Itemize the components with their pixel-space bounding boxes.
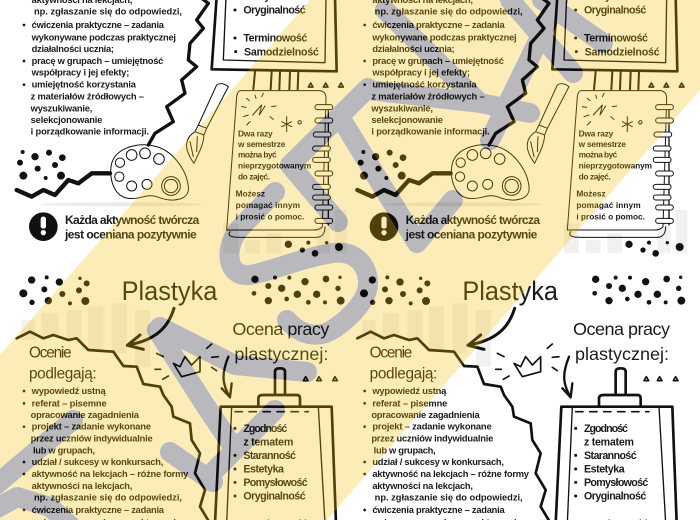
- callout text: [405, 213, 540, 241]
- list: ocenie podlegaja: aktywności na lekcjach,: [372, 481, 473, 491]
- shadow: [42, 202, 202, 206]
- arrow: [127, 308, 174, 349]
- zigzag lower: [357, 173, 451, 197]
- list: ocenie podlegaja continued: np. zgłaszanie się do odpowiedzi,: [375, 7, 523, 17]
- list: ocena pracy continued: Terminowość: [584, 33, 648, 45]
- title: Plastyka: [462, 276, 558, 306]
- list: ocenie podlegaja: lub w grupach,: [33, 445, 95, 455]
- list: ocenie podlegaja continued: i porządkowanie informacji.: [31, 127, 149, 137]
- callout text: jest oceniana pozytywnie: [64, 227, 197, 241]
- list: ocena pracy: Estetyka: [243, 464, 284, 476]
- heading: ocena pracy: Ocena pracy: [573, 319, 670, 339]
- list: ocenie podlegaja continued: działalności ucznia;: [32, 44, 114, 54]
- list: ocenie podlegaja: przez uczniów indywidualnie: [371, 434, 493, 444]
- list: ocenie podlegaja: opracowanie zagadnienia: [31, 410, 140, 420]
- list: ocenie podlegaja continued: umiejętność korzystania: [372, 80, 477, 90]
- list: ocenie podlegaja: referat – pisemne: [372, 398, 447, 408]
- pale brush strokes: [564, 210, 687, 253]
- list: ocena pracy: Zgodność: [243, 423, 287, 435]
- list: ocena pracy: z tematem: [584, 437, 634, 449]
- heading: ocena pracy: [232, 319, 329, 364]
- heading: ocena pracy: plastycznej:: [234, 344, 328, 364]
- list: ocena pracy: Pomysłowość: [584, 477, 648, 489]
- triangles: [303, 377, 337, 381]
- notebook text: Możesz: [576, 189, 606, 199]
- heading: ocena pracy: Ocena pracy: [232, 319, 329, 339]
- list: ocenie podlegaja continued: np. zgłaszanie się do odpowiedzi,: [34, 7, 182, 17]
- list: ocenie podlegaja: udział / sukcesy w konkursach,: [372, 457, 504, 467]
- dots right: [592, 276, 685, 305]
- list: ocenie podlegaja: projekt – zadanie wykonane: [32, 422, 151, 432]
- list: ocenie podlegaja: opracowanie zagadnienia: [371, 410, 480, 420]
- icon: palette: [451, 145, 529, 200]
- list: ocenie podlegaja: np. zgłaszanie się do odpowiedzi,: [375, 493, 523, 503]
- list: ocenie podlegaja: lub w grupach,: [374, 445, 436, 455]
- arrow: [222, 357, 232, 397]
- panel: bottom right tile: [357, 275, 685, 520]
- zigzag divider: [489, 0, 549, 145]
- list: ocena pracy: Oryginalność: [584, 491, 646, 503]
- list: ocenie podlegaja: udział / sukcesy w konkursach,: [32, 457, 163, 467]
- zigzag divider: [17, 332, 210, 520]
- list: ocenie podlegaja continued: działalności ucznia;: [372, 44, 455, 54]
- panel: top right tile: [357, 0, 687, 257]
- icon: brush: [527, 84, 569, 163]
- notebook text: [576, 128, 652, 222]
- frame: easel: [552, 0, 677, 71]
- list: ocena pracy: Staranność: [243, 450, 296, 462]
- list: ocenie podlegaja: aktywność na lekcjach – różne formy: [32, 469, 189, 479]
- notebook text: i prosić o pomoc.: [576, 212, 645, 222]
- frame: bag: [215, 368, 336, 520]
- list: ocena pracy continued: [574, 0, 660, 58]
- callout text: jest oceniana pozytywnie: [405, 227, 538, 241]
- list: ocenie podlegaja continued: i porządkowanie informacji.: [371, 127, 490, 137]
- list: ocenie podlegaja continued: pracę w grupach – umiejętność: [372, 56, 504, 66]
- title: Plastyka: [122, 276, 217, 306]
- list: ocenie podlegaja: ćwiczenia praktyczne – zadania: [372, 505, 505, 515]
- heading: ocena pracy: [573, 319, 670, 364]
- list: ocena pracy: Pomysłowość: [243, 477, 308, 489]
- pale brush strokes: [362, 303, 491, 367]
- callout text: Każda aktywność twórcza: [406, 213, 540, 227]
- notebook text: można być: [579, 150, 618, 160]
- list: ocenie podlegaja: referat – pisemne: [32, 398, 107, 408]
- heading: ocenie podlegaja: [29, 344, 97, 382]
- list: ocenie podlegaja: aktywność na lekcjach – różne formy: [372, 469, 530, 479]
- list: ocena pracy: z tematem: [243, 437, 293, 449]
- notebook: [227, 91, 333, 237]
- list: ocena pracy continued: Oryginalność: [243, 5, 306, 17]
- pale brush strokes: [223, 210, 347, 253]
- heading: ocenie podlegaja: Ocenie: [370, 344, 412, 361]
- list: ocena pracy continued: Oryginalność: [584, 5, 646, 17]
- list: ocena pracy continued: Terminowość: [243, 33, 307, 45]
- icon: crown: [496, 344, 559, 379]
- arrow: [562, 357, 572, 397]
- notebook text: do zajęć.: [579, 171, 611, 181]
- list: ocenie podlegaja continued: współpracy i jej efekty;: [31, 68, 129, 78]
- notebook text: w semestrze: [237, 139, 286, 149]
- icon: exclamation: [370, 212, 398, 241]
- notebook text: Możesz: [236, 189, 265, 199]
- list: ocenie podlegaja: [363, 386, 530, 520]
- list: ocenie podlegaja continued: [23, 0, 182, 137]
- arrow: [468, 308, 515, 349]
- list: ocenie podlegaja continued: wykonywane podczas praktycznej: [371, 32, 517, 42]
- dots left: [19, 275, 90, 305]
- zigzag divider: [357, 332, 551, 520]
- frame: bag: [556, 368, 677, 520]
- dots lower: [625, 241, 684, 257]
- notebook text: pomagać innym: [236, 200, 300, 210]
- dots: [358, 150, 406, 180]
- notebook text: pomagać innym: [576, 200, 641, 210]
- list: ocena pracy: Staranność: [584, 450, 637, 462]
- list: ocena pracy continued: Samodzielność: [244, 46, 319, 58]
- heading: ocenie podlegaja: podlegają:: [370, 365, 437, 382]
- list: ocenie podlegaja continued: selekcjonowanie: [371, 115, 443, 125]
- icon: exclamation: [29, 212, 58, 241]
- icon: brush: [187, 84, 228, 163]
- dots left: [360, 275, 430, 305]
- list: ocena pracy: Oryginalność: [243, 491, 306, 503]
- list: ocenie podlegaja continued: z materiałów źródłowych –: [31, 91, 144, 101]
- list: ocenie podlegaja: ćwiczenia praktyczne – zadania: [32, 505, 165, 515]
- heading: ocenie podlegaja: Ocenie: [29, 344, 72, 361]
- list: ocena pracy: Estetyka: [584, 464, 625, 476]
- list: ocena pracy continued: Samodzielność: [585, 46, 660, 58]
- zigzag lower: [17, 173, 110, 197]
- notebook text: Dwa razy: [238, 128, 273, 138]
- icon: crown: [155, 344, 218, 379]
- notebook text: i prosić o pomoc.: [236, 212, 304, 222]
- triangles: [649, 83, 684, 87]
- dots lower: [285, 241, 343, 257]
- frame: easel: [212, 0, 337, 71]
- notebook text: [236, 128, 311, 222]
- shadow: [382, 202, 542, 206]
- list: ocenie podlegaja continued: ćwiczenia praktyczne – zadania: [32, 20, 165, 30]
- zigzag divider: [148, 0, 208, 145]
- list: ocena pracy: Zgodność: [584, 423, 628, 435]
- dots: [17, 150, 66, 180]
- list: ocenie podlegaja continued: wyszukiwanie,: [30, 103, 92, 113]
- list: ocenie podlegaja: wypowiedź ustną: [371, 386, 447, 396]
- heading: ocena pracy: plastycznej:: [575, 344, 669, 364]
- list: ocenie podlegaja continued: umiejętność korzystania: [32, 80, 137, 90]
- callout text: Każda aktywność twórcza: [65, 213, 200, 227]
- list: ocenie podlegaja continued: wykonywane podczas praktycznej: [31, 32, 176, 42]
- notebook: [567, 91, 673, 237]
- notebook text: Dwa razy: [579, 128, 614, 138]
- notebook text: do zajęć.: [238, 171, 270, 181]
- notebook text: nieprzygotowanym: [238, 161, 311, 171]
- list: ocenie podlegaja continued: pracę w grupach – umiejętność: [32, 56, 163, 66]
- callout text: [64, 213, 200, 241]
- list: ocena pracy continued: [233, 0, 319, 58]
- list: ocenie podlegaja: np. zgłaszanie się do odpowiedzi,: [34, 493, 182, 503]
- list: ocenie podlegaja continued: ćwiczenia praktyczne – zadania: [372, 20, 505, 30]
- heading: ocenie podlegaja: [370, 344, 437, 382]
- list: ocenie podlegaja: przez uczniów indywidualnie: [31, 434, 153, 444]
- notebook text: w semestrze: [578, 139, 626, 149]
- notebook text: można być: [238, 150, 277, 160]
- list: ocenie podlegaja continued: selekcjonowanie: [31, 115, 102, 125]
- notebook text: nieprzygotowanym: [579, 161, 652, 171]
- triangles: [308, 83, 343, 87]
- list: ocena pracy: [233, 423, 308, 520]
- dots right: [251, 276, 345, 305]
- list: ocenie podlegaja continued: współpracy i jej efekty;: [371, 68, 470, 78]
- list: ocena pracy: [574, 423, 648, 520]
- panel: top left tile: [17, 0, 347, 257]
- list: ocenie podlegaja: wypowiedź ustną: [31, 386, 106, 396]
- list: ocenie podlegaja: projekt – zadanie wykonane: [372, 422, 492, 432]
- list: ocenie podlegaja continued: wyszukiwanie,: [370, 103, 433, 113]
- list: ocenie podlegaja: aktywności na lekcjach,: [32, 481, 132, 491]
- list: ocenie podlegaja: [23, 386, 189, 520]
- triangles: [644, 377, 678, 381]
- list: ocenie podlegaja continued: z materiałów źródłowych –: [371, 91, 485, 101]
- pale brush strokes: [22, 303, 150, 367]
- heading: ocenie podlegaja: podlegają:: [29, 365, 97, 382]
- list: ocenie podlegaja continued: [363, 0, 523, 137]
- icon: palette: [111, 145, 188, 200]
- panel: bottom left tile: [17, 275, 345, 520]
